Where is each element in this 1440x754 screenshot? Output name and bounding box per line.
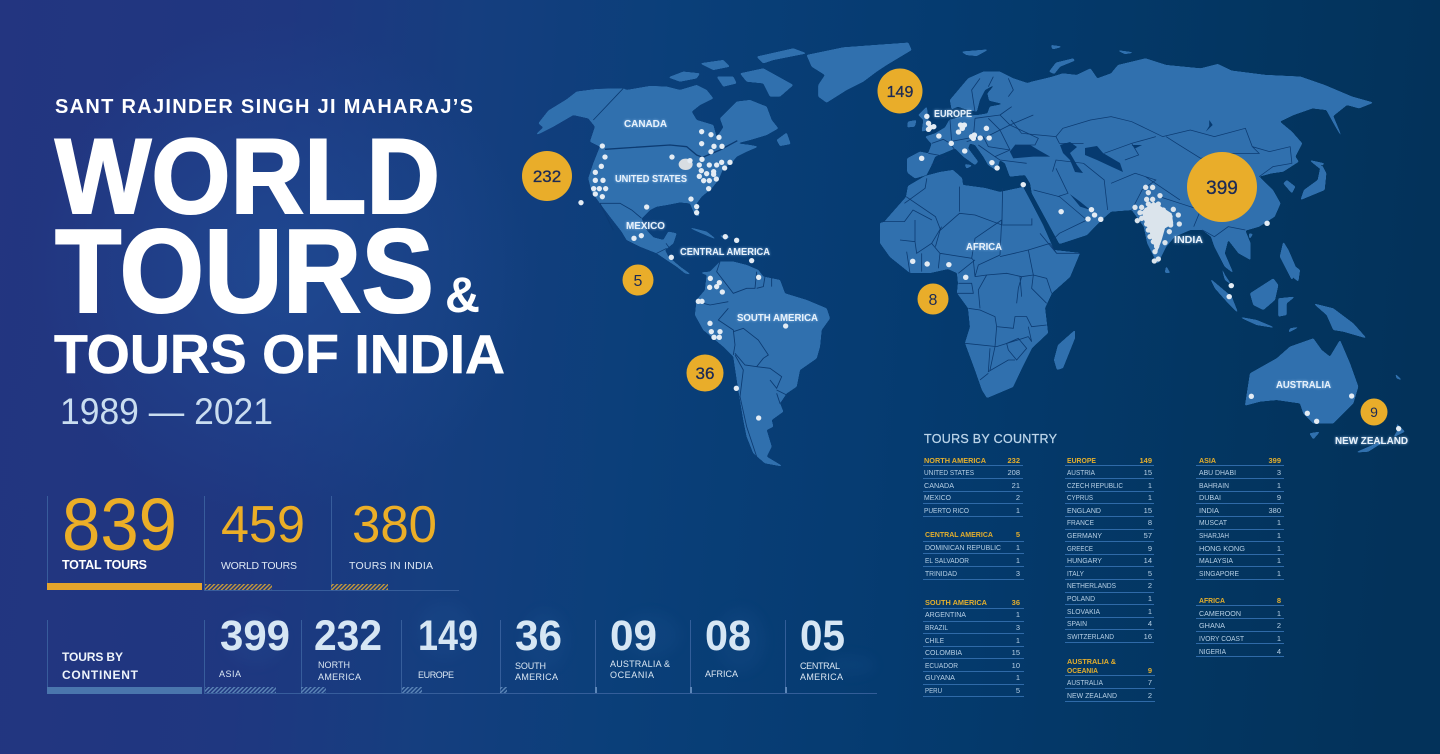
- table: north america: CANADA: [924, 481, 954, 490]
- table: asia: SHARJAH: [1199, 531, 1229, 540]
- table: asia: MUSCAT: [1199, 518, 1227, 527]
- bubble: asia 399: 399: [1206, 178, 1238, 199]
- table: africa: 8: [1277, 596, 1281, 605]
- table: europe: 1: [1148, 493, 1152, 502]
- table: asia: ASIA: [1199, 456, 1217, 465]
- table: europe: 16: [1144, 632, 1152, 641]
- divider lines: [48, 496, 459, 590]
- table: australia and oceania: 7: [1148, 678, 1152, 687]
- table: north america: 2: [1016, 493, 1020, 502]
- stat: total tours: 839: [62, 483, 177, 566]
- stat: north america: AMERICA: [318, 672, 361, 682]
- table: europe: SLOVAKIA: [1067, 607, 1100, 616]
- stat: north america: 232: [314, 612, 382, 660]
- stat: tours in india: 380: [352, 496, 437, 554]
- stat: central america: CENTRAL: [800, 661, 840, 671]
- headline: world: WORLD: [55, 116, 440, 236]
- table: europe: EUROPE: [1067, 456, 1096, 465]
- table: asia: 1: [1277, 569, 1281, 578]
- australia: [1245, 338, 1358, 439]
- table: africa: NIGERIA: [1199, 647, 1226, 656]
- table: central america: CENTRAL AMERICA: [925, 530, 994, 539]
- table: europe: AUSTRIA: [1067, 468, 1095, 477]
- land: southeast asia and oceania: [1210, 260, 1405, 453]
- africa country borders: [900, 220, 1080, 380]
- table: europe: 149: [1139, 456, 1152, 465]
- ampersand: &: [445, 267, 480, 323]
- bubble: oceania 9: [1360, 398, 1388, 426]
- table: asia: BAHRAIN: [1199, 481, 1229, 490]
- table: europe: 15: [1144, 506, 1152, 515]
- stat: total tours: [47, 483, 202, 590]
- table: central america: [923, 530, 1024, 580]
- table: south america: 5: [1016, 686, 1020, 695]
- table: south america: COLOMBIA: [925, 648, 962, 657]
- table: europe: GERMANY: [1067, 531, 1102, 540]
- table: europe: SWITZERLAND: [1067, 632, 1114, 641]
- table: africa: CAMEROON: [1199, 609, 1241, 618]
- table: south america: [923, 598, 1024, 696]
- continent heading: [47, 650, 202, 694]
- table: europe: ENGLAND: [1067, 506, 1102, 515]
- europe country borders: [928, 77, 1038, 165]
- table: south america: SOUTH AMERICA: [925, 598, 988, 607]
- map labels: NEW ZEALAND: [1335, 436, 1408, 447]
- table: africa: AFRICA: [1199, 596, 1226, 605]
- stat: europe: [402, 612, 478, 693]
- map labels: INDIA: [1174, 235, 1203, 246]
- table: central america: 1: [1016, 543, 1020, 552]
- table: asia: 1: [1277, 518, 1281, 527]
- table: south america: 1: [1016, 610, 1020, 619]
- bubble: north america 232: [522, 151, 572, 201]
- stat: tours in india: [331, 496, 437, 590]
- faint continent silhouettes: [225, 602, 875, 675]
- table: europe: NETHERLANDS: [1067, 581, 1116, 590]
- map labels: SOUTH AMERICA: [737, 313, 818, 324]
- stat: south america: SOUTH: [515, 661, 546, 671]
- stat: africa: AFRICA: [705, 669, 738, 679]
- tours by country table: [923, 432, 1284, 702]
- new zealand: [1355, 423, 1405, 453]
- table: europe: 15: [1144, 468, 1152, 477]
- continent heading: TOURS BY: [62, 650, 123, 664]
- land: africa: [880, 170, 1080, 398]
- stat: south america: AMERICA: [515, 672, 558, 682]
- tour location dots: [578, 114, 1401, 431]
- table: asia: ABU DHABI: [1199, 468, 1236, 477]
- land: caspian and aral seas: [1060, 142, 1123, 173]
- table: europe: 1: [1148, 607, 1152, 616]
- table: north america: NORTH AMERICA: [924, 456, 987, 465]
- table: central america: 3: [1016, 569, 1020, 578]
- stat: central america: AMERICA: [800, 672, 843, 682]
- stat: australia and oceania: OCEANIA: [610, 670, 654, 680]
- table: central america: TRINIDAD: [925, 569, 958, 578]
- table: africa: IVORY COAST: [1199, 634, 1244, 643]
- table: central america: DOMINICAN REPUBLIC: [925, 543, 1002, 552]
- map labels: [615, 109, 1408, 447]
- bubble: north america 232: 232: [533, 167, 561, 186]
- dots: oceania: [1249, 393, 1401, 431]
- land: south america: [695, 262, 830, 467]
- table: central america: EL SALVADOR: [925, 556, 970, 565]
- table: asia: 3: [1277, 468, 1281, 477]
- map labels: AFRICA: [966, 242, 1002, 253]
- tour totals panel: [47, 483, 459, 590]
- table: south america: 3: [1016, 623, 1020, 632]
- table heading: TOURS BY COUNTRY: [924, 432, 1058, 446]
- subtitle: SANT RAJINDER SINGH JI MAHARAJ’S: [55, 96, 473, 118]
- map labels: MEXICO: [626, 221, 665, 232]
- stat: world tours: 459: [221, 496, 305, 554]
- table: north america: MEXICO: [924, 493, 951, 502]
- table: asia: 380: [1268, 506, 1281, 515]
- stat: south america: 36: [515, 612, 562, 660]
- stat: asia: 399: [220, 612, 290, 660]
- stat: world tours: [205, 496, 305, 590]
- map labels: CENTRAL AMERICA: [680, 247, 770, 258]
- table: europe: POLAND: [1067, 594, 1096, 603]
- table: asia: 1: [1277, 531, 1281, 540]
- table: australia and oceania: AUSTRALIA &: [1067, 657, 1117, 666]
- table: south america: BRAZIL: [925, 623, 948, 632]
- table: europe: CZECH REPUBLIC: [1067, 481, 1123, 490]
- table: africa: 1: [1277, 634, 1281, 643]
- table: africa: GHANA: [1199, 621, 1225, 630]
- table: europe: 5: [1148, 569, 1152, 578]
- table: asia: [1196, 456, 1284, 580]
- stat: north america: [301, 612, 382, 693]
- table: asia: INDIA: [1199, 506, 1219, 515]
- stat: world tours: WORLD TOURS: [221, 560, 297, 572]
- bubble: europe 149: 149: [887, 84, 913, 101]
- table: europe: GREECE: [1067, 544, 1093, 553]
- stat: australia and oceania: [595, 612, 670, 693]
- stat: north america: NORTH: [318, 660, 350, 670]
- table: central america: 1: [1016, 556, 1020, 565]
- dots: europe, middle east, africa, east asia: [910, 114, 1270, 299]
- date range: 1989 — 2021: [60, 391, 273, 432]
- table: asia: 1: [1277, 556, 1281, 565]
- table: north america: 1: [1016, 506, 1020, 515]
- table: south america: 1: [1016, 636, 1020, 645]
- map labels: UNITED STATES: [615, 174, 687, 185]
- stat: asia: ASIA: [219, 669, 241, 679]
- table: europe: 4: [1148, 619, 1152, 628]
- table: europe: CYPRUS: [1067, 493, 1093, 502]
- title glow: [0, 0, 560, 560]
- table: australia and oceania: 2: [1148, 691, 1152, 700]
- table: europe: FRANCE: [1067, 518, 1094, 527]
- stat: asia: [205, 612, 290, 693]
- divider lines: [48, 620, 877, 694]
- table: south america: CHILE: [925, 636, 944, 645]
- stat: europe: 149: [418, 612, 478, 660]
- table: australia and oceania: AUSTRALIA: [1067, 678, 1103, 687]
- table: europe: 1: [1148, 594, 1152, 603]
- table: europe: 2: [1148, 581, 1152, 590]
- table: north america: 232: [1007, 456, 1020, 465]
- table: south america: 36: [1012, 598, 1020, 607]
- table: australia and oceania: [1065, 657, 1155, 702]
- map labels: AUSTRALIA: [1276, 380, 1331, 391]
- stat: africa: 08: [705, 612, 751, 660]
- map labels: CANADA: [624, 119, 667, 130]
- table: asia: 399: [1268, 456, 1281, 465]
- dots: south america: [696, 276, 788, 421]
- stat: africa: [690, 612, 751, 693]
- stat: australia and oceania: 09: [610, 612, 657, 660]
- table: australia and oceania: NEW ZEALAND: [1067, 691, 1118, 700]
- bubble: africa 8: 8: [929, 292, 938, 309]
- land: north america: [527, 43, 912, 275]
- table: europe: 9: [1148, 544, 1152, 553]
- table: europe: 14: [1144, 556, 1152, 565]
- table: australia and oceania: OCEANIA: [1067, 666, 1099, 675]
- headline: tours: TOURS: [55, 205, 434, 338]
- table: north america: UNITED STATES: [924, 468, 974, 477]
- tours by continent panel: [47, 602, 877, 694]
- land: eurasia: [907, 45, 1374, 280]
- africa northern borders: [882, 178, 1032, 247]
- bubble: south america 36: 36: [696, 364, 714, 383]
- table: europe: 1: [1148, 481, 1152, 490]
- table: europe: ITALY: [1067, 569, 1084, 578]
- table: north america: 208: [1007, 468, 1020, 477]
- table: south america: ECUADOR: [925, 661, 959, 670]
- table: africa: 1: [1277, 609, 1281, 618]
- table: south america: 15: [1012, 648, 1020, 657]
- stat: europe: EUROPE: [418, 670, 454, 680]
- bubble: south america 36: [686, 354, 724, 392]
- stat: central america: [785, 612, 845, 693]
- table: africa: 2: [1277, 621, 1281, 630]
- map labels: EUROPE: [934, 109, 972, 120]
- table: asia: 1: [1277, 544, 1281, 553]
- table: north america: [923, 456, 1023, 516]
- stat: australia and oceania: AUSTRALIA &: [610, 659, 670, 669]
- table: south america: GUYANA: [925, 673, 955, 682]
- table: europe: HUNGARY: [1067, 556, 1102, 565]
- stat: south america: [500, 612, 562, 693]
- table: asia: DUBAI: [1199, 493, 1221, 502]
- bubble: europe 149: [878, 68, 922, 114]
- stat: central america: 05: [800, 612, 845, 660]
- table: asia: 1: [1277, 481, 1281, 490]
- table: south america: 10: [1012, 661, 1020, 670]
- table: asia: HONG KONG: [1199, 544, 1245, 553]
- continent heading: CONTINENT: [62, 668, 139, 682]
- headline: tours of india: TOURS OF INDIA: [54, 323, 505, 385]
- stat: total tours: TOTAL TOURS: [62, 558, 147, 572]
- table: north america: PUERTO RICO: [924, 506, 969, 515]
- bubble: africa 8: [918, 284, 948, 314]
- table: north america: 21: [1012, 481, 1020, 490]
- table: africa: [1196, 596, 1284, 656]
- table: asia: MALAYSIA: [1199, 556, 1233, 565]
- bubble: central america 5: [622, 264, 654, 296]
- table: central america: 5: [1016, 530, 1020, 539]
- bubble: asia 399: [1187, 152, 1257, 222]
- title block: [54, 96, 505, 432]
- table: australia and oceania: 9: [1148, 666, 1152, 675]
- table: africa: 4: [1277, 647, 1281, 656]
- table: europe: [1065, 456, 1154, 642]
- bubble: central america 5: 5: [634, 273, 643, 290]
- table: europe: 57: [1144, 531, 1152, 540]
- bubble: oceania 9: 9: [1370, 404, 1378, 420]
- table: south america: 1: [1016, 673, 1020, 682]
- world map: [527, 43, 1405, 467]
- table: south america: ARGENTINA: [925, 610, 966, 619]
- table: asia: SINGAPORE: [1199, 569, 1239, 578]
- dots: india cluster: [1132, 185, 1182, 264]
- stat: tours in india: TOURS IN INDIA: [349, 560, 433, 572]
- continent count bubbles: [522, 68, 1388, 426]
- table: asia: 9: [1277, 493, 1281, 502]
- dots: americas: [578, 129, 761, 280]
- table: europe: SPAIN: [1067, 619, 1087, 628]
- table: europe: 8: [1148, 518, 1152, 527]
- table: south america: PERU: [925, 686, 942, 695]
